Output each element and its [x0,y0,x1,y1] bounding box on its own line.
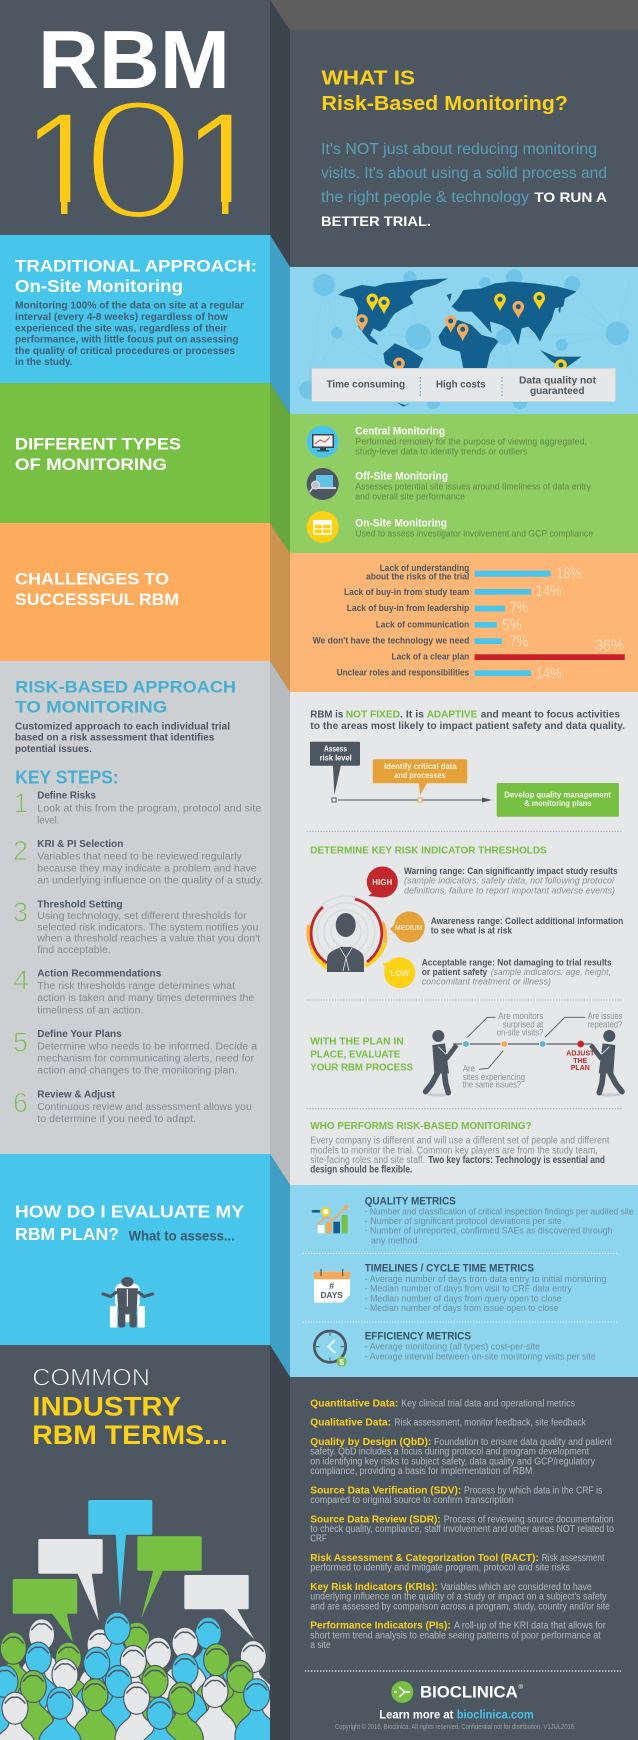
diagram: tug of war evaluation: PLAN [571,1065,590,1072]
bar chart: challenges: 14% [536,583,562,600]
metrics: timelines: - Median number of days from query open to close [365,1293,562,1304]
step 3: 3 [13,897,28,928]
heading: how do I evaluate: HOW DO I EVALUATE MY [15,1202,244,1222]
callout bar: drawbacks: Time consuming [326,380,405,390]
text block: traditional approach description: the quality of critical procedures or processes [15,346,235,357]
footer: copyright: Copyright © 2016, Bioclinica. All rights reserved. Confidential not for distribution. V1JUL2016. [335,1723,576,1731]
text block: traditional approach description: interval (every 4-8 weeks) regardless of how [15,312,228,323]
heading: different types of monitoring: DIFFERENT TYPES [15,435,181,454]
step 6 [13,1087,252,1125]
heading: what is risk-based monitoring: Risk-Based Monitoring? [322,93,568,115]
logo: Bioclinica [391,1681,524,1703]
step 1: 1 [14,788,28,819]
text block: glossary of terms: a site [310,1640,331,1651]
callout: high: HIGH [372,878,393,887]
text block: traditional approach description: performance, with little focus put on assessing [15,335,238,346]
illustration: speech bubbles [13,1500,254,1642]
title: RBM 101: RBM [38,13,230,106]
step 5: Determine who needs to be informed. Decide a [37,1040,257,1052]
text block: central monitoring [355,426,587,457]
text block: customized approach: Customized approach to each individual trial [15,721,230,732]
heading: what is risk-based monitoring: WHAT IS [322,67,415,89]
callout: low: Acceptable range: Not damaging to trial results [422,957,612,968]
heading: traditional approach: TRADITIONAL APPROACH: [15,257,257,276]
bar chart: challenges: Lack of understanding [380,563,469,573]
footer: learn more link [379,1707,534,1721]
text block: glossary of terms: Risk Assessment & Categorization Tool (RACT): [310,1553,539,1564]
text block: glossary of terms: Quantitative Data: [310,1398,398,1409]
footer: learn more link: Learn more at [379,1707,453,1721]
step 6: Continuous review and assessment allows you [37,1101,252,1113]
title: RBM 101: 1 [183,82,264,245]
heading: different types of monitoring: OF MONITORING [15,455,167,474]
text block: glossary of terms: Performance Indicators (PIs): [310,1621,451,1632]
callout bar: drawbacks: guaranteed [530,386,584,397]
metrics: quality: QUALITY METRICS [365,1195,456,1207]
text block: traditional approach description [15,301,244,368]
heading: risk-based approach: RISK-BASED APPROACH [15,677,236,696]
text block: glossary of terms [310,1398,614,1651]
text block: definition: It's NOT just about reducing monitoring [321,141,597,158]
heading: with the plan in place [310,1035,413,1073]
step 2: an underlying influence on the quality of a study. [37,875,263,887]
title: RBM 101: 0 [81,64,196,256]
metrics: efficiency: EFFICIENCY METRICS [365,1330,471,1342]
diagram: tug of war evaluation: Are issues [588,1011,623,1021]
panel: background terms [0,1345,638,1740]
logo: Bioclinica: BIOCLINICA [420,1683,518,1701]
text block: glossary of terms: and are assessed by comparison across a program, study, country and/or site [310,1601,610,1612]
bar chart: challenges: We don't have the technology we need [313,635,469,645]
illustration: crowd [0,1612,278,1740]
bar chart: challenges: about the risks of the trial [366,572,469,582]
text block: who performs: site-facing roles and site staff. [310,1155,425,1166]
step 5 [13,1027,257,1077]
panel: background different types [0,383,638,553]
text block: central monitoring: Performed remotely for the purpose of viewing aggregated, [355,437,587,448]
icon: off-site monitoring [307,468,339,500]
callout: high [367,866,618,898]
bar chart: challenges: 18% [556,565,582,582]
flow diagram: adaptive process: Identify critical data [384,762,457,771]
step 4: timeliness of an action. [37,1004,143,1016]
step 2: KRI & PI Selection [37,839,123,850]
icon: person with risk rings [308,896,385,972]
diagram: tug of war evaluation: the same issues? [463,1080,521,1090]
text block: definition [321,141,607,229]
metrics: timelines: - Median number of days from issue open to close [365,1303,558,1314]
icon: clock and dollar: $ [339,1357,344,1367]
callout: medium: to see what is at risk [431,926,513,937]
step 4: The risk thresholds range determines what [37,980,235,992]
flow diagram: adaptive process [310,742,619,817]
bar chart: challenges: Lack of buy-in from study team [344,587,469,597]
text block: central monitoring: study-level data to identify trends or outliers [355,446,528,457]
heading: risk-based approach [15,677,236,716]
step 3 [13,897,260,956]
text block: off-site monitoring: Assesses potential site issues around timeliness of data entry [355,482,591,493]
text block: RBM is not fixed: ADAPTIVE [427,709,477,721]
heading: how do I evaluate: RBM PLAN? [15,1224,119,1244]
panel: background dark left title [0,0,638,267]
flow diagram: adaptive process: Develop quality management [504,790,611,799]
metrics: quality: any method [371,1235,418,1246]
metrics: timelines: - Average number of days from data entry to initial monitoring [365,1274,606,1285]
text block: customized approach: potential issues. [15,744,92,755]
footer: learn more link: bioclinica.com [457,1707,534,1721]
callout: low: or patient safety [422,967,488,978]
text block: glossary of terms: short term trend analysis to enable seeing patterns of poor performance at [310,1630,601,1641]
step 6: to determine if you need to adapt. [37,1113,196,1125]
panel: background evaluate plan [0,1154,638,1377]
text block: glossary of terms: to check quality, compliance, staff involvement and other areas NOT related to [310,1524,614,1535]
text block: glossary of terms: underlying influence on the quality of a study or impact on a subject's safety [310,1592,607,1603]
callout bar: drawbacks [312,368,616,402]
text block: glossary of terms: Key clinical trial data and operational metrics [401,1398,575,1409]
text block: definition: visits. It's about using a solid process and [321,165,607,182]
text block: RBM is not fixed: NOT FIXED [346,709,400,721]
step 2: Variables that need to be reviewed regularly [37,850,242,862]
text block: RBM is not fixed: RBM is [310,709,343,721]
metrics: efficiency [314,1330,596,1367]
bar chart: challenges: Lack of communication [376,619,470,629]
icon: map pins [356,292,567,377]
diagram: tug of war evaluation: sites experiencing [463,1072,525,1082]
heading: how do I evaluate [15,1202,244,1244]
heading: common industry RBM terms [32,1365,228,1450]
flow diagram: adaptive process: risk level [320,753,352,762]
text block: glossary of terms: performed to identify and mitigate program, protocol and site risks [310,1563,570,1574]
text block: off-site monitoring [355,471,591,502]
step 6: 6 [13,1087,28,1118]
callout: medium [390,912,623,942]
step 3: find acceptable. [37,944,111,956]
diagram: tug of war evaluation: repeated? [588,1019,622,1029]
text block: RBM is not fixed: . It is [400,709,424,721]
icon: calendar days: # [329,1281,334,1291]
text block: definition: BETTER TRIAL. [321,213,431,229]
text block: who performs: Two key factors: Technology is essential and [428,1155,605,1166]
text block: glossary of terms: compared to original source to confirm transcription [310,1495,514,1506]
bar chart: challenges: 7% [510,600,528,617]
heading: challenges: CHALLENGES TO [15,570,169,589]
step 4 [13,964,254,1016]
text block: off-site monitoring: and overall site performance [355,491,465,502]
title: RBM 101: 1 [22,82,103,245]
title: RBM 101 [37,31,232,217]
metrics: efficiency: - Average interval between on-site monitoring visits per site [365,1351,596,1362]
step 1: Look at this from the program, protocol and site [37,802,261,814]
callout: low: LOW [390,969,409,978]
callout bar: drawbacks: Data quality not [519,376,597,386]
text block: glossary of terms: compliance, providing a basis for implementation of RBM [310,1466,532,1477]
text block: who performs: models to monitor the trial. Common key players are from the study team, [310,1145,598,1156]
text block: glossary of terms: CRF [310,1534,327,1545]
text block: who performs [310,1136,610,1176]
heading: key steps: KEY STEPS: [15,767,119,787]
logo: Bioclinica: ® [518,1684,524,1691]
step 4: action is taken and many times determines the [37,992,254,1004]
step 5: 5 [13,1027,28,1058]
callout: low [382,957,612,988]
heading: determine thresholds: DETERMINE KEY RISK INDICATOR THRESHOLDS [310,844,547,856]
bar chart: challenges: Unclear roles and responsibilities [337,668,469,678]
heading: different types of monitoring [15,435,181,474]
text block: glossary of terms: Qualitative Data: [310,1418,391,1429]
step 3: when a threshold reaches a value that you don't [36,933,260,945]
text block: traditional approach description: Monitoring 100% of the data on site at a regular [15,301,244,312]
text block: off-site monitoring: Off-Site Monitoring [355,471,448,483]
bar chart: challenges: 5% [502,617,522,634]
metrics: efficiency: - Average monitoring (all types) cost-per-site [365,1342,540,1353]
step 4: 4 [13,964,29,995]
text block: glossary of terms: Foundation to ensure data quality and patient [434,1437,612,1448]
metrics: quality [312,1195,634,1246]
step 2: 2 [13,835,28,866]
text block: on-site monitoring [355,518,593,539]
metrics: quality: - Number of significant protocol deviations per site [365,1216,562,1227]
heading: with the plan in place: PLACE, EVALUATE [310,1048,400,1060]
bar chart: challenges: Lack of a clear plan [392,652,470,662]
text block: glossary of terms: Process by which data in the CRF is [464,1485,602,1496]
step 1: Define Risks [37,791,96,802]
text block: RBM is not fixed: to the areas most likely to impact patient safety and data quality. [310,720,625,732]
heading: common industry RBM terms: INDUSTRY [32,1391,181,1421]
heading: traditional approach [15,257,257,296]
text block: on-site monitoring: On-Site Monitoring [355,518,447,530]
metrics: timelines: TIMELINES / CYCLE TIME METRICS [365,1263,534,1275]
diagram: tug of war evaluation [426,1011,623,1097]
icon: shrugging man in chair [102,1277,154,1328]
flow diagram: adaptive process: & monitoring plans [524,799,592,808]
text block: RBM is not fixed [310,709,625,732]
diagram: tug of war evaluation: Are [463,1064,475,1074]
step 5: action and changes to the monitoring plan. [37,1065,237,1077]
text block: definition: the right people & technology [321,189,529,206]
heading: how do I evaluate: What to assess... [129,1228,235,1244]
icon: calendar days: DAYS [320,1290,343,1300]
heading: with the plan in place: WITH THE PLAN IN [310,1035,404,1047]
callout bar: drawbacks: High costs [436,380,486,390]
step 5: Define Your Plans [37,1029,122,1040]
step 2: because they may indicate a problem and have [37,863,257,875]
step 1 [14,788,261,826]
flow diagram: adaptive process: Assess [324,745,347,754]
icon: central monitoring [307,426,339,458]
text block: who performs: design should be flexible. [310,1165,413,1176]
bar chart: challenges [313,563,625,683]
callout: low: concomitant treatment or illness) [422,977,551,988]
heading: challenges: SUCCESSFUL RBM [15,590,179,609]
heading: challenges [15,570,179,609]
diagram: tug of war evaluation: Are monitors [498,1011,544,1021]
flow diagram: adaptive process: and processes [394,771,446,780]
icon: clock and dollar [314,1331,347,1367]
text block: glossary of terms: on identifying key risks to subject safety, data quality and GCP/regulatory [310,1456,595,1467]
step 5: mechanism for communicating alerts, need for [37,1053,255,1065]
text block: glossary of terms: Source Data Review (SDR): [310,1514,441,1525]
callout: high: definitions, failure to report important adverse events) [404,885,615,896]
text block: glossary of terms: Key Risk Indicators (KRIs): [310,1582,438,1593]
callout: high: (sample indicators: safety data, not following protocol [404,876,615,887]
text block: definition: TO RUN A [534,189,607,205]
text block: glossary of terms: Risk assessment [542,1553,605,1564]
step 3: Using technology, set different thresholds for [37,910,247,922]
step 2 [13,835,263,887]
callout: medium: MEDIUM [395,925,422,932]
step 3: Threshold Setting [37,899,123,910]
text block: glossary of terms: A roll-up of the KRI data that allows for [454,1621,606,1632]
text block: glossary of terms: Variables which are considered to have [441,1582,592,1593]
heading: common industry RBM terms: COMMON [32,1365,150,1392]
text block: glossary of terms: Quality by Design (QbD): [310,1437,431,1448]
text block: central monitoring: Central Monitoring [355,426,445,438]
diagram: tug of war evaluation: on-site visits? [497,1027,543,1037]
callout: low: (sample indicators: age, height, [491,967,611,978]
text block: customized approach: based on a risk assessment that identifies [15,733,215,744]
text block: RBM is not fixed: and meant to focus activities [481,709,620,721]
world map [299,269,636,409]
bar chart: challenges: 14% [536,666,562,683]
heading: risk-based approach: TO MONITORING [15,697,167,716]
step 4: Action Recommendations [37,969,162,980]
heading: with the plan in place: YOUR RBM PROCESS [310,1061,413,1073]
step 6: Review & Adjust [37,1089,116,1100]
bar chart: challenges: 36% [595,637,624,654]
text block: glossary of terms: Risk assessment, monitor feedback, site feedback [394,1418,586,1429]
text block: glossary of terms: Process of reviewing source documentation [444,1514,614,1525]
bar chart: challenges: Lack of buy-in from leadership [347,603,470,613]
text block: glossary of terms: Source Data Verification (SDV): [310,1485,461,1496]
panel: background challenges [0,523,638,692]
metrics: timelines [314,1263,606,1314]
metrics: timelines: - Median number of days from visit to CRF data entry [365,1284,572,1295]
heading: who performs RBM: WHO PERFORMS RISK-BASED MONITORING? [310,1120,532,1132]
heading: what is risk-based monitoring [322,67,568,115]
panel: background risk-based approach [0,661,638,1185]
metrics: quality: - Number of unreported, confirmed SAEs as discovered through [365,1226,612,1237]
text block: customized approach [15,721,230,755]
step 1: level. [37,814,59,826]
icon: on-site monitoring [307,511,339,543]
text block: traditional approach description: in the study. [15,357,73,368]
text block: traditional approach description: experienced the site was, regardless of their [15,323,227,334]
diagram: tug of war evaluation: surprised at [503,1019,544,1029]
icon: calendar days [314,1269,350,1303]
text block: glossary of terms: safety. QbD includes a focus during protocol and program development [310,1447,589,1458]
step 3: selected risk indicators. The system notifies you [37,921,258,933]
panel: background traditional approach [0,235,638,414]
text block: on-site monitoring: Used to assess investigator involvement and GCP compliance [355,528,593,539]
heading: common industry RBM terms: RBM TERMS... [32,1420,228,1450]
icon: quality chart [312,1205,348,1233]
diagram: tug of war evaluation: THE [573,1058,588,1065]
bar chart: challenges: 7% [510,634,528,651]
diagram: tug of war evaluation: ADJUST [566,1051,595,1058]
heading: traditional approach: On-Site Monitoring [15,276,183,296]
text block: who performs: Every company is different and will use a different set of people and different [310,1136,610,1147]
